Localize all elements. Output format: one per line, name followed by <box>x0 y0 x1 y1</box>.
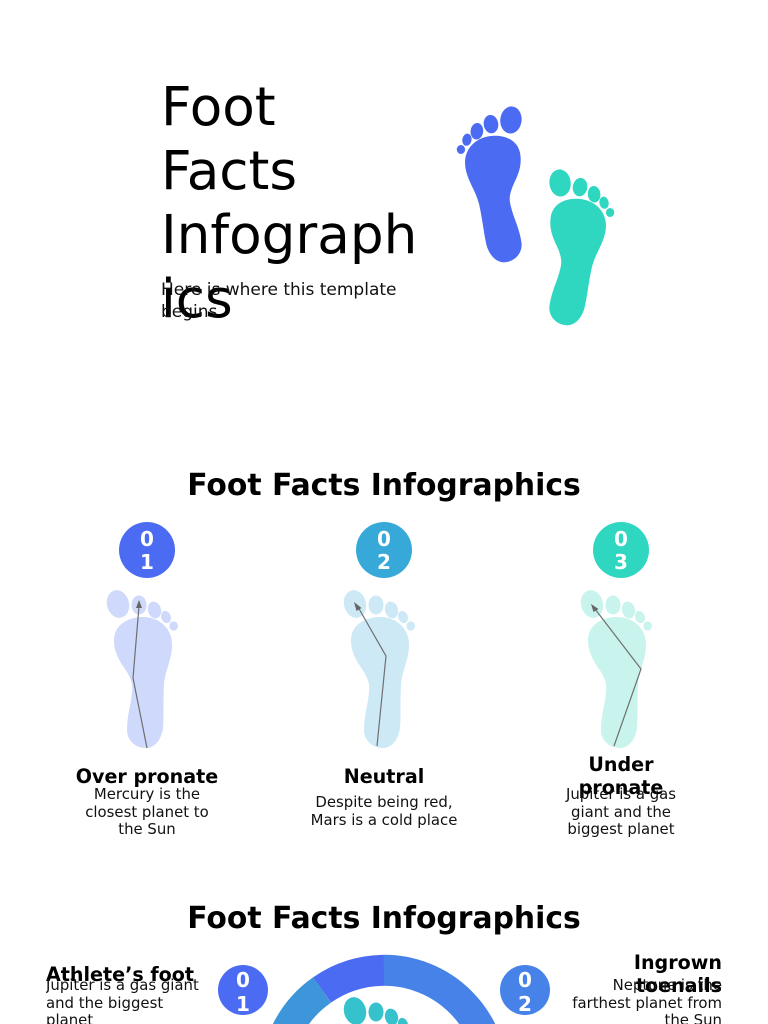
text: over pronate: the Sun <box>118 820 176 838</box>
text: over pronate: Mercury is the <box>94 785 200 803</box>
text: over pronate <box>85 785 209 838</box>
text: neutral <box>311 793 457 829</box>
label: over pronate: Over pronate <box>76 765 218 788</box>
label: under pronate <box>579 753 663 799</box>
label: under pronate: pronate <box>579 776 663 799</box>
label: under pronate: Under <box>588 753 654 776</box>
title <box>161 76 417 330</box>
number badge 02: 2 <box>377 550 391 574</box>
label: athlete's foot: Athlete’s foot <box>46 963 194 986</box>
subtitle <box>161 280 396 322</box>
number badge 03: 3 <box>614 550 628 574</box>
heading: section 2: Foot Facts Infographics <box>187 901 581 936</box>
text: athlete's foot: and the biggest <box>46 994 163 1012</box>
number badge bottom 02 <box>500 965 550 1015</box>
label: ingrown toenails: toenails <box>636 974 722 997</box>
title: ics <box>161 268 233 330</box>
title: Foot <box>161 76 276 138</box>
subtitle: begins <box>161 302 217 322</box>
foot diagram: neutral <box>341 588 415 748</box>
icon: foot inside donut <box>341 995 415 1024</box>
number badge 03 <box>593 522 649 578</box>
number badge 01 <box>119 522 175 578</box>
foot diagram: over pronate <box>104 588 178 748</box>
text: neutral: Despite being red, <box>315 793 453 811</box>
text: neutral: Mars is a cold place <box>311 811 457 829</box>
label: ingrown toenails <box>634 951 722 997</box>
number badge bottom 01 <box>218 965 268 1015</box>
number badge 01: 0 <box>140 527 154 551</box>
text: over pronate: closest planet to <box>85 803 209 821</box>
text: athlete's foot <box>46 977 199 1024</box>
label: neutral: Neutral <box>344 765 424 788</box>
text: under pronate: Jupiter is a gas <box>566 785 676 803</box>
title: Facts <box>161 140 297 202</box>
icon: blue foot <box>451 102 546 267</box>
donut chart <box>276 970 493 1024</box>
text: ingrown toenails: farthest planet from <box>572 994 722 1012</box>
foot diagram: under pronate <box>578 588 652 748</box>
number badge 02 <box>356 522 412 578</box>
number badge bottom 02: 0 <box>518 968 532 992</box>
title: Infograph <box>161 204 417 266</box>
number badge 03: 0 <box>614 527 628 551</box>
number badge 01: 1 <box>140 550 154 574</box>
subtitle: Here is where this template <box>161 280 396 300</box>
number badge bottom 01: 0 <box>236 968 250 992</box>
heading: section 1: Foot Facts Infographics <box>187 468 581 503</box>
text: under pronate: giant and the <box>571 803 671 821</box>
text: under pronate <box>565 785 676 838</box>
text: under pronate: biggest planet <box>567 820 675 838</box>
label: ingrown toenails: Ingrown <box>634 951 722 974</box>
icon: teal foot <box>525 165 620 330</box>
number badge 02: 0 <box>377 527 391 551</box>
text: ingrown toenails <box>572 977 722 1024</box>
